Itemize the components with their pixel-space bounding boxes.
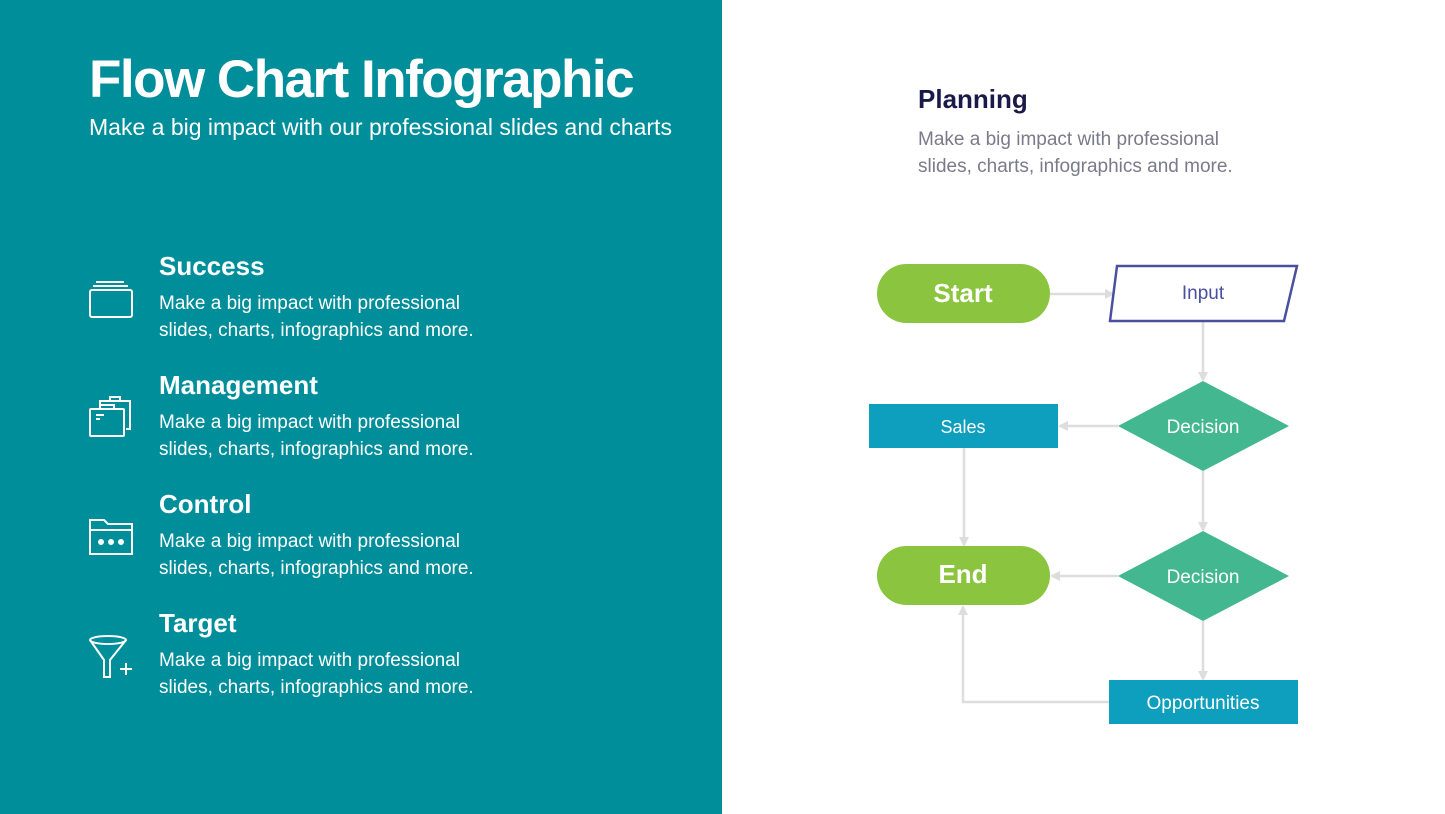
- item: target: [89, 608, 474, 698]
- node: start: [877, 264, 1050, 323]
- item: control: Make a big impact with professional: [159, 531, 460, 552]
- node: decision 2: [1118, 531, 1289, 621]
- item: management: [89, 370, 474, 460]
- node: input: [1110, 266, 1297, 321]
- item: management: Management: [159, 370, 318, 400]
- icon: folder dots: [89, 519, 133, 555]
- item: target: Target: [159, 608, 237, 638]
- item: control: slides, charts, infographics and more.: [159, 558, 474, 579]
- node: opportunities: [1109, 680, 1298, 724]
- item: target: Make a big impact with professional: [159, 650, 460, 671]
- node: start: Start: [933, 278, 993, 308]
- node: sales: Sales: [940, 417, 986, 437]
- item: success: slides, charts, infographics and more.: [159, 320, 474, 341]
- icon: briefcases: [89, 396, 131, 437]
- item: success: Make a big impact with professional: [159, 293, 460, 314]
- subtitle: Make a big impact with our professional slides and charts: [89, 114, 672, 140]
- node: decision 1: [1118, 381, 1289, 471]
- icon: folder stack: [89, 281, 133, 318]
- item: target: slides, charts, infographics and more.: [159, 677, 474, 698]
- item: control: Control: [159, 489, 251, 519]
- text: planning description: slides, charts, infographics and more.: [918, 156, 1233, 177]
- node: input: Input: [1182, 283, 1225, 304]
- heading: planning: Planning: [918, 84, 1028, 114]
- panel: left teal: [0, 0, 722, 814]
- title: Flow Chart Infographic: [89, 50, 633, 109]
- item: success: Success: [159, 251, 265, 281]
- item: management: Make a big impact with professional: [159, 412, 460, 433]
- text: planning description: [918, 129, 1233, 177]
- item: management: slides, charts, infographics and more.: [159, 439, 474, 460]
- arrows: [963, 294, 1203, 702]
- node: decision 1: Decision: [1167, 417, 1239, 438]
- node: end: [877, 546, 1050, 605]
- node: decision 2: Decision: [1167, 567, 1239, 588]
- icon: funnel plus: [89, 635, 132, 678]
- item: success: [89, 251, 474, 341]
- item: control: [89, 489, 474, 579]
- node: end: End: [938, 559, 988, 589]
- node: sales: [869, 404, 1058, 448]
- text: planning description: Make a big impact with professional: [918, 129, 1219, 150]
- node: opportunities: Opportunities: [1146, 693, 1260, 714]
